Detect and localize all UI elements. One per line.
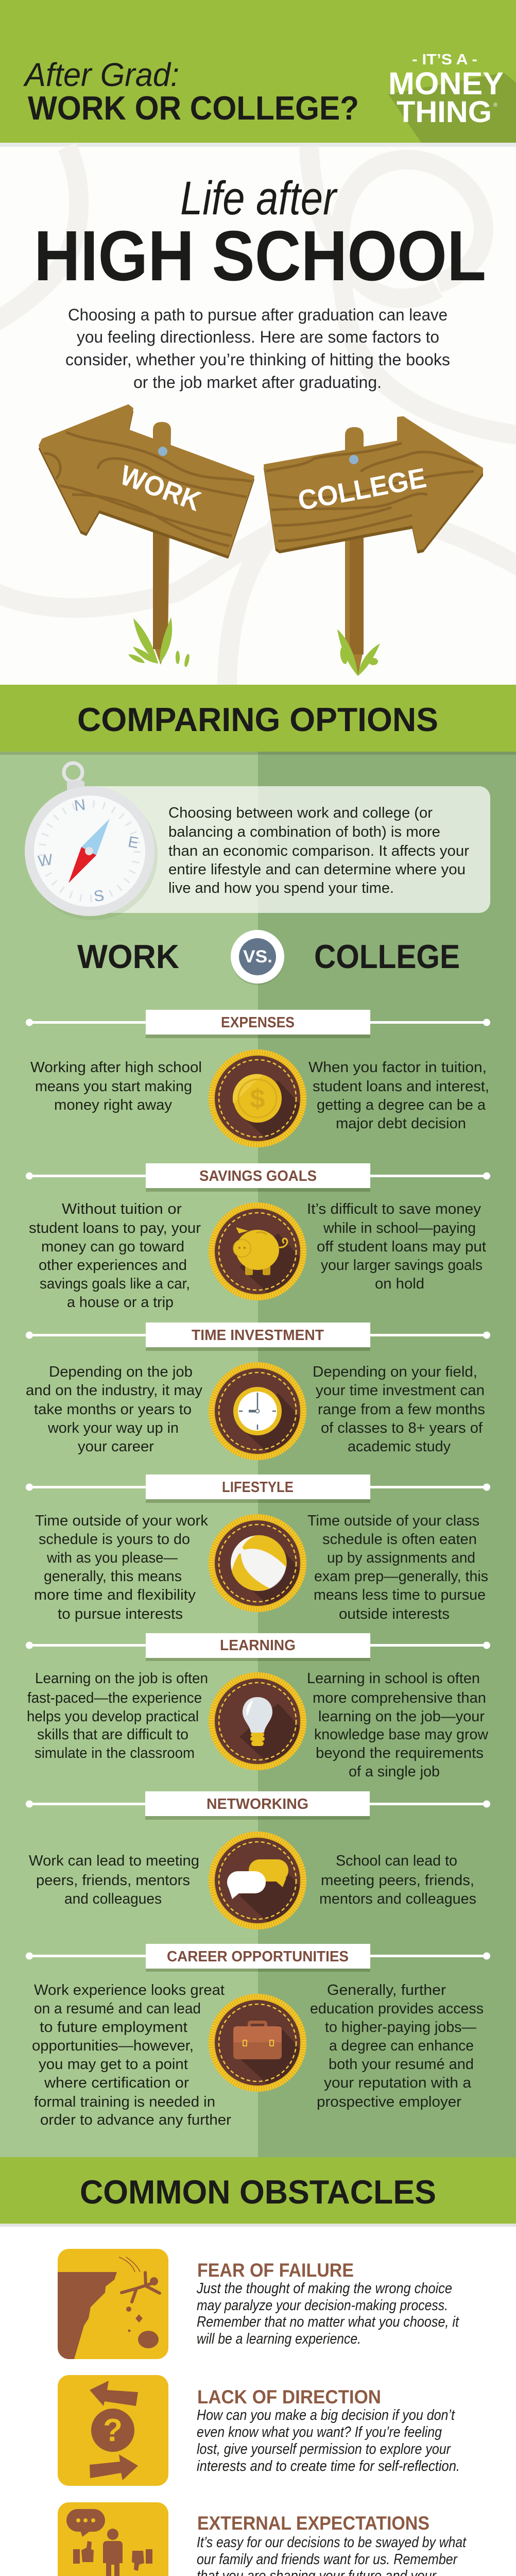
panel: comparison background xyxy=(0,752,516,2157)
text: networking work: and colleagues xyxy=(64,1891,162,1907)
text: networking work: Work can lead to meeting xyxy=(29,1853,199,1869)
icon: coin medallion: $ xyxy=(250,1084,265,1114)
row label: time investment xyxy=(26,1323,490,1351)
text: lifestyle college: schedule is often eaten xyxy=(322,1531,477,1548)
icon: vs badge: VS. xyxy=(243,947,272,967)
callout: work vs college intro: Choosing between work and college (or xyxy=(168,805,433,821)
wooden sign: college: COLLEGE xyxy=(296,463,429,516)
text: savings goals college: your larger savings goals xyxy=(321,1257,483,1274)
row label: time investment: TIME INVESTMENT xyxy=(192,1327,324,1344)
row label: lifestyle xyxy=(26,1475,490,1503)
text: learning work: fast-paced—the experience xyxy=(27,1690,202,1706)
text: time investment college: range from a few months xyxy=(318,1401,485,1418)
text: expenses college: getting a degree can be a xyxy=(317,1097,486,1113)
text: learning college: learning on the job—your xyxy=(318,1708,485,1725)
heading: lack of direction: LACK OF DIRECTION xyxy=(197,2386,381,2408)
text: fear of failure: may paralyze your decision-making process. xyxy=(197,2297,448,2314)
text: lifestyle college: outside interests xyxy=(339,1606,450,1622)
text: expenses college: student loans and interest, xyxy=(313,1078,489,1095)
text: time investment work xyxy=(26,1364,202,1455)
logo: It's a Money Thing: MONEY xyxy=(388,66,504,101)
text: fear of failure xyxy=(196,2280,460,2347)
text: time investment work: your career xyxy=(78,1438,154,1455)
main title: Life after xyxy=(180,172,338,225)
text: lifestyle work: to pursue interests xyxy=(58,1606,183,1622)
callout: work vs college intro: live and how you spend your time. xyxy=(168,880,394,896)
row label: networking: NETWORKING xyxy=(207,1796,308,1812)
row: savings goals xyxy=(26,1163,490,1311)
text: networking college: School can lead to xyxy=(336,1853,457,1869)
header title: After Grad: xyxy=(23,56,179,93)
text: expenses work: money right away xyxy=(54,1097,172,1113)
text: career college: both your resumé and xyxy=(329,2056,474,2073)
text: savings goals work: other experiences and xyxy=(39,1257,187,1274)
banner: common obstacles: COMMON OBSTACLES xyxy=(80,2173,436,2211)
text: lifestyle college: means less time to pursue xyxy=(314,1587,486,1603)
icon: compass: W xyxy=(37,851,54,870)
text: lifestyle college: Time outside of your class xyxy=(307,1513,479,1529)
text: expenses college: major debt decision xyxy=(336,1115,466,1132)
text: expenses work: Working after high school xyxy=(30,1059,202,1076)
text: lack of direction xyxy=(197,2407,460,2475)
text: external expectations: It’s easy for our decisions to be swayed by what xyxy=(197,2534,467,2551)
text: expenses work: means you start making xyxy=(35,1078,192,1095)
logo: It's a Money Thing: ® xyxy=(493,102,497,108)
text: career college: your reputation with a xyxy=(324,2075,472,2091)
text: networking college: meeting peers, friends, xyxy=(321,1872,474,1889)
row label: expenses: EXPENSES xyxy=(221,1014,295,1031)
text: learning work: skills that are difficult to xyxy=(37,1726,188,1743)
text: learning college xyxy=(307,1670,489,1780)
icon: compass: E xyxy=(127,833,140,852)
row label: savings goals xyxy=(26,1163,490,1192)
text: learning work: Learning on the job is often xyxy=(35,1670,208,1687)
text: lifestyle work xyxy=(34,1513,209,1622)
icon: compass xyxy=(25,763,158,920)
icon: piggy bank medallion xyxy=(209,1202,306,1300)
text: fear of failure: Just the thought of making the wrong choice xyxy=(196,2280,452,2297)
heading: fear of failure: FEAR OF FAILURE xyxy=(197,2260,354,2281)
main title xyxy=(34,172,486,296)
text: learning college: more comprehensive than xyxy=(313,1690,486,1706)
text: savings goals work xyxy=(29,1201,201,1311)
text: career work: formal training is needed in xyxy=(34,2094,215,2110)
text: fear of failure: Remember that no matter what you choose, it xyxy=(197,2314,460,2330)
row: expenses xyxy=(26,1010,490,1147)
text: learning college: Learning in school is often xyxy=(307,1670,480,1687)
callout: work vs college intro: balancing a combination of both) is more xyxy=(168,824,440,840)
text: lifestyle work: generally, this means xyxy=(44,1568,182,1585)
text: lack of direction: even know what you want? If you’re feeling xyxy=(197,2424,442,2441)
background squiggle paths xyxy=(0,147,516,685)
grass: college post xyxy=(337,629,380,676)
text: time investment college xyxy=(313,1364,485,1455)
header title xyxy=(23,56,359,127)
icon: coin medallion xyxy=(209,1049,306,1147)
icon: light bulb medallion xyxy=(209,1672,306,1770)
text: lifestyle work: with as you please— xyxy=(46,1550,178,1566)
text: learning college: beyond the requirements xyxy=(316,1745,484,1761)
text: career work: Work experience looks great xyxy=(34,1982,225,1998)
white obstacles panel xyxy=(0,2227,516,2576)
text: learning work: simulate in the classroom xyxy=(35,1745,195,1761)
intro paragraph: consider, whether you’re thinking of hitting the books xyxy=(65,350,450,369)
wooden sign: work: WORK xyxy=(116,460,205,517)
callout: work vs college intro xyxy=(82,786,490,913)
text: fear of failure: will be a learning experience. xyxy=(197,2331,361,2347)
logo: It's a Money Thing: - IT’S A - xyxy=(412,52,477,68)
text: savings goals work: a house or a trip xyxy=(67,1294,174,1311)
text: career work: opportunities—however, xyxy=(32,2038,194,2054)
text: lack of direction: How can you make a big decision if you don’t xyxy=(197,2407,456,2424)
icon: vs badge xyxy=(231,930,284,985)
text: lack of direction: lost, give yourself permission to explore your xyxy=(197,2441,451,2458)
text: savings goals college: while in school—paying xyxy=(323,1220,476,1236)
icon: speech bubbles medallion xyxy=(209,1832,306,1929)
text: career college: education provides access xyxy=(310,2001,484,2017)
text: lack of direction: interests and to create time for self-reflection. xyxy=(197,2458,460,2475)
intro paragraph: Choosing a path to pursue after graduation can leave xyxy=(68,306,448,324)
text: time investment college: your time investment can xyxy=(316,1382,485,1399)
text: expenses college: When you factor in tuition, xyxy=(308,1059,487,1076)
text: career work: to future employment xyxy=(40,2019,187,2036)
text: expenses college xyxy=(308,1059,489,1132)
row: lifestyle xyxy=(26,1475,490,1622)
banner: comparing options: COMPARING OPTIONS xyxy=(77,701,438,738)
text: time investment college: Depending on your field, xyxy=(313,1364,477,1380)
row: learning xyxy=(26,1633,490,1780)
text: learning college: knowledge base may grow xyxy=(314,1726,489,1743)
text: networking work: peers, friends, mentors xyxy=(36,1872,190,1889)
icon: clock medallion xyxy=(209,1362,306,1460)
text: savings goals college: It’s difficult to save money xyxy=(307,1201,481,1217)
text: career college xyxy=(310,1982,484,2110)
row label: networking xyxy=(26,1791,490,1820)
header title: WORK OR COLLEGE? xyxy=(28,89,359,127)
text: time investment work: and on the industry, it may xyxy=(26,1382,202,1399)
text: savings goals college xyxy=(307,1201,486,1292)
heading: external expectations: EXTERNAL EXPECTATIONS xyxy=(197,2513,429,2534)
text: networking college: mentors and colleagues xyxy=(319,1891,476,1907)
grass: work post xyxy=(128,617,191,668)
text: savings goals work: student loans to pay, your xyxy=(29,1220,201,1236)
column heading: work: WORK xyxy=(77,938,179,975)
column heading: college: COLLEGE xyxy=(314,938,460,975)
text: external expectations xyxy=(197,2534,467,2576)
text: career work xyxy=(32,1982,231,2128)
wooden sign: college xyxy=(265,417,482,676)
icon: falling from cliff xyxy=(58,2249,168,2359)
text: time investment work: Depending on the job xyxy=(49,1364,193,1380)
icon: briefcase medallion xyxy=(209,1994,306,2092)
text: lifestyle work: schedule is yours to do xyxy=(39,1531,190,1548)
text: career work: on a resumé and can lead xyxy=(34,2001,201,2017)
text: expenses work xyxy=(30,1059,202,1113)
text: savings goals work: savings goals like a car, xyxy=(40,1276,190,1292)
text: career work: order to advance any further xyxy=(40,2112,231,2128)
obstacle: external expectations xyxy=(58,2502,467,2576)
text: career college: prospective employer xyxy=(317,2094,461,2110)
row: networking xyxy=(26,1791,490,1929)
text: career work: where certification or xyxy=(44,2075,189,2091)
text: networking work xyxy=(29,1853,199,1907)
text: lifestyle college xyxy=(307,1513,488,1622)
row label: savings goals: SAVINGS GOALS xyxy=(199,1168,317,1184)
icon: arrows and question mark xyxy=(58,2375,168,2486)
text: savings goals college: on hold xyxy=(375,1276,424,1292)
text: savings goals work: Without tuition or xyxy=(62,1201,182,1217)
logo: It's a Money Thing xyxy=(388,52,504,129)
banner: common obstacles xyxy=(0,2157,516,2227)
icon: person with opinions xyxy=(58,2502,168,2576)
text: learning work xyxy=(27,1670,208,1761)
text: career college: Generally, further xyxy=(327,1982,446,1998)
row: time investment xyxy=(26,1323,490,1460)
row: career opportunities xyxy=(26,1944,490,2128)
wooden sign: work xyxy=(40,405,253,668)
text: lifestyle college: up by assignments and xyxy=(327,1550,475,1566)
text: savings goals work: money can go toward xyxy=(41,1239,184,1255)
text: time investment college: academic study xyxy=(348,1438,451,1455)
text: time investment work: take months or years to xyxy=(34,1401,192,1418)
intro paragraph xyxy=(65,306,450,392)
text: lifestyle work: Time outside of your work xyxy=(35,1513,209,1529)
text: learning college: of a single job xyxy=(349,1764,440,1780)
row label: expenses xyxy=(26,1010,490,1038)
text: career college: to higher-paying jobs— xyxy=(325,2019,476,2036)
banner: comparing options xyxy=(0,685,516,752)
row label: lifestyle: LIFESTYLE xyxy=(222,1479,294,1496)
row label: learning xyxy=(26,1633,490,1661)
icon: compass: S xyxy=(93,887,105,905)
obstacle: fear of failure xyxy=(58,2249,460,2359)
row label: learning: LEARNING xyxy=(220,1637,296,1654)
text: learning work: helps you develop practical xyxy=(27,1708,199,1725)
icon: compass: N xyxy=(73,796,87,815)
icon: arrows and question mark: ? xyxy=(103,2413,123,2448)
text: lifestyle college: exam prep—generally, this xyxy=(314,1568,488,1585)
text: time investment college: of classes to 8+ years of xyxy=(321,1420,483,1436)
intro paragraph: or the job market after graduating. xyxy=(133,373,382,392)
text: external expectations: our family and friends want for us. Remember xyxy=(197,2551,458,2568)
header banner xyxy=(0,0,516,147)
logo: It's a Money Thing: THING xyxy=(397,95,492,129)
text: career work: you may get to a point xyxy=(39,2056,188,2073)
row label: career opportunities: CAREER OPPORTUNITIES xyxy=(167,1948,349,1965)
text: time investment work: work your way up in xyxy=(47,1420,179,1436)
text: savings goals college: off student loans may put xyxy=(317,1239,486,1255)
icon: beach ball medallion xyxy=(209,1514,306,1612)
intro paragraph: you feeling directionless. Here are some factors to xyxy=(77,328,439,346)
row label: career opportunities xyxy=(26,1944,490,1972)
obstacle: lack of direction xyxy=(58,2375,460,2486)
text: networking college xyxy=(319,1853,476,1907)
text: career college: a degree can enhance xyxy=(329,2038,474,2054)
callout: work vs college intro: than an economic comparison. It affects your xyxy=(168,843,469,859)
text: lifestyle work: more time and flexibility xyxy=(34,1587,196,1603)
callout: work vs college intro: entire lifestyle and can determine where you xyxy=(168,861,466,878)
